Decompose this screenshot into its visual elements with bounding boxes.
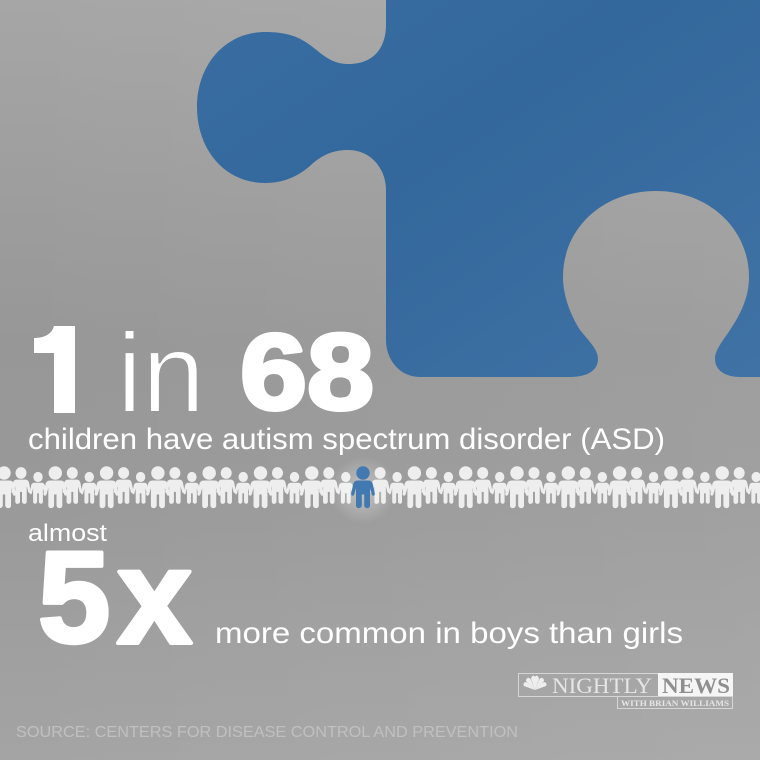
subheading: children have ASD: children have autism spectrum disorder (ASD) [28, 423, 665, 456]
logo: NBC Nightly News [518, 673, 733, 708]
headline: 1 in 68: 1 [27, 312, 87, 433]
statistic: 5x: 5 [38, 524, 110, 670]
source note: SOURCE: CENTERS FOR DISEASE CONTROL AND PREVENTION [16, 724, 518, 741]
highlighted blue person [351, 466, 375, 508]
headline: 1 in 68: in [117, 310, 205, 436]
headline: 1 in 68: 68 [240, 311, 374, 432]
logo: NBC Nightly News: WITH BRIAN WILLIAMS [621, 699, 730, 708]
row of people [0, 456, 760, 524]
text: more common in boys than girls: more common in boys than girls [215, 617, 683, 650]
logo: NBC Nightly News: NIGHTLY [552, 673, 652, 698]
icon: peacock [523, 676, 547, 690]
logo: NBC Nightly News: NEWS [662, 673, 730, 698]
headline: 1 in 68 [34, 326, 372, 413]
puzzle piece [197, 0, 760, 377]
statistic: 5x: x [117, 521, 192, 672]
label: almost: almost [28, 520, 107, 547]
